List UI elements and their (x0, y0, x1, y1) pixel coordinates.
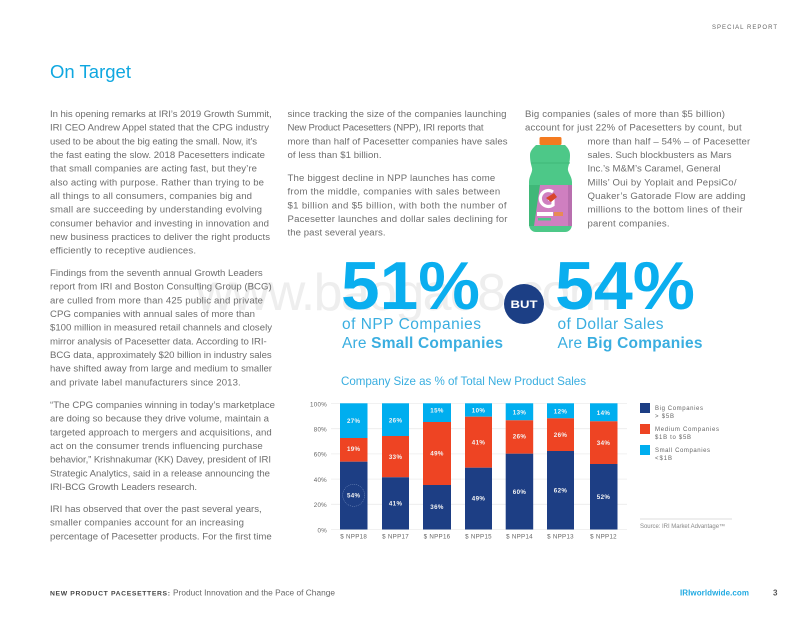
paragraph: biggest decline: $1 billion and $5 billion, with both the number of (288, 200, 507, 211)
text block: column 3: millions to the bottom lines of their (588, 205, 743, 216)
paragraph: growth leaders report: have shifted away from large and medium to smaller (50, 364, 273, 375)
text block: column 3: parent companies. (588, 218, 670, 229)
legend item: small companies (640, 445, 710, 462)
value labels: 26% (389, 417, 402, 424)
paragraph: growth leaders report: CPG companies with annual sales of more than (50, 309, 255, 320)
value labels: 26% (554, 432, 567, 439)
x axis labels: $ NPP17 (382, 534, 409, 540)
paragraph: growth leaders report: $100 million in measured retail channels and closely (50, 323, 272, 334)
paragraph: growth leaders report: mirror analysis of Pacesetter data. According to IRI- (50, 336, 267, 347)
paragraph: smaller companies (50, 504, 272, 542)
x axis labels (340, 534, 617, 540)
text block: column 3: Inc.’s M&M’s Caramel, General (588, 164, 720, 175)
paragraph: growth leaders report: and private label manufacturers since 2013. (50, 377, 241, 388)
value labels: 34% (597, 440, 610, 447)
value labels: 52% (597, 494, 610, 501)
badge: but: BUT (510, 299, 538, 311)
value labels: 49% (430, 451, 444, 458)
paragraph: growth leaders report: report from IRI and Boston Consulting Group (BCG) (50, 282, 272, 293)
x axis labels: $ NPP18 (340, 534, 367, 540)
y axis labels: 80% (314, 426, 327, 434)
paragraph: opening remarks: efficiently to receptive audiences. (50, 246, 196, 257)
value labels: 13% (513, 409, 526, 416)
legend item: medium companies: $1B to $5B (655, 435, 691, 441)
legend item: big companies: Big Companies (655, 406, 703, 412)
paragraph: opening remarks: used to be about the big eating the small. Now, it’s (50, 136, 257, 147)
footer: publication line (50, 588, 335, 598)
text block: column 3: account for just 22% of Pacesetters by count, but (525, 123, 742, 134)
paragraph: growth leaders report (50, 268, 273, 388)
legend item: big companies (640, 403, 703, 420)
value labels: 14% (597, 410, 610, 417)
callout: 54% of dollar sales: Are Big Companies (558, 335, 702, 352)
value labels (347, 407, 610, 511)
callout: 51% of NPP companies (341, 248, 503, 352)
paragraph: quote: targeted approach to mergers and acquisitions, and (50, 427, 272, 438)
value labels: 10% (472, 407, 485, 414)
text block: column 3: Quaker’s Gatorade Flow are adding (588, 191, 746, 202)
header: special report: SPECIAL REPORT (712, 25, 777, 31)
x axis labels: $ NPP12 (590, 534, 617, 540)
paragraph: opening remarks: that small companies are acting fast, but they’re (50, 164, 257, 175)
paragraph: smaller companies: smaller companies account for an increasing (50, 518, 244, 529)
value labels: 54% (347, 493, 361, 500)
legend item: small companies: <$1B (655, 456, 672, 462)
paragraph: quote: “The CPG companies winning in today’s marketplace (50, 400, 275, 411)
footer: page number: 3 (773, 588, 778, 598)
legend item: big companies: > $5B (655, 414, 674, 420)
paragraph: tracking size: New Product Pacesetters (NPP), IRI reports that (288, 123, 484, 134)
paragraph: biggest decline: The biggest decline in NPP launches has come (288, 173, 495, 184)
paragraph: growth leaders report: BCG data, approximately $20 billion in industry sales (50, 350, 272, 361)
value labels: 15% (430, 407, 444, 414)
bar: NPP18 (340, 403, 368, 530)
value labels: 33% (389, 454, 402, 461)
text block: column 2 (288, 109, 508, 239)
legend item: medium companies: Medium Companies (655, 427, 719, 433)
paragraph: quote: act on the consumer trends influencing purchase (50, 441, 263, 452)
legend item: medium companies (640, 424, 719, 441)
icon: gatorade bottle (529, 137, 572, 232)
value labels: 36% (430, 504, 444, 511)
y axis labels: 20% (314, 502, 327, 509)
paragraph: opening remarks: the fast eating the slow. 2018 Pacesetters indicate (50, 150, 265, 161)
text block: column 3: Big companies (sales of more than $5 billion) (525, 109, 725, 120)
paragraph: quote (50, 400, 275, 493)
callout: 51% of NPP companies: Are Small Companies (342, 335, 503, 352)
callout: 54% of dollar sales: of Dollar Sales (558, 316, 664, 333)
text block: column 3: sales. Such blockbusters as Mars (588, 150, 732, 161)
value labels: 60% (513, 489, 526, 496)
bar: NPP16 (423, 403, 451, 530)
paragraph: tracking size: more than half of Pacesetter companies have sales (288, 136, 508, 147)
paragraph: biggest decline: Pacesetter launches and dollar sales declining for (288, 214, 508, 225)
callout: 54% of dollar sales (555, 248, 702, 352)
text block: column 3: more than half – 54% – of Pacesetter (588, 136, 751, 147)
paragraph: tracking size: of less than $1 billion. (288, 150, 382, 161)
paragraph: tracking size: since tracking the size of the companies launching (288, 109, 506, 120)
y axis labels (310, 401, 327, 534)
bar: NPP12 (590, 403, 618, 530)
value labels: 26% (513, 433, 526, 440)
value labels: 12% (554, 408, 567, 415)
paragraph: quote: behavior,” Krishnakumar (KK) Davey, president of IRI (50, 455, 271, 466)
paragraph: opening remarks: new business practices to deliver the right products (50, 232, 270, 243)
text block: column 3: Mills’ Oui by Yoplait and PepsiCo/ (588, 177, 737, 188)
paragraph: quote: are doing so because they drive volume, maintain a (50, 414, 270, 425)
paragraph: opening remarks (50, 109, 272, 257)
paragraph: biggest decline: the past several years. (288, 228, 386, 239)
chart title: Company Size as % of Total New Product Sales (341, 375, 586, 388)
y axis labels: 40% (314, 477, 327, 484)
legend item: small companies: Small Companies (655, 448, 710, 454)
paragraph: tracking size (288, 109, 508, 161)
x axis labels: $ NPP13 (547, 534, 574, 540)
x axis labels: $ NPP15 (465, 534, 492, 540)
paragraph: biggest decline (288, 173, 508, 239)
paragraph: opening remarks: consumer behavior and investing in innovation and (50, 218, 269, 229)
paragraph: growth leaders report: Findings from the seventh annual Growth Leaders (50, 268, 263, 279)
value labels: 62% (554, 487, 567, 494)
value labels: 41% (389, 501, 402, 508)
legend (640, 403, 719, 462)
paragraph: smaller companies: IRI has observed that over the past several years, (50, 504, 262, 515)
paragraph: opening remarks: also acting with purpose. Rather than trying to be (50, 177, 264, 188)
badge: but (504, 284, 544, 324)
source note: Source: IRI Market Advantage™ (640, 523, 725, 530)
y axis labels: 60% (314, 452, 327, 459)
callout: 51% of NPP companies: 51% (341, 248, 480, 324)
text: www.baogao8.com (195, 264, 612, 322)
footer: publication line: NEW PRODUCT PACESETTERS: (50, 590, 170, 598)
callout: 51% of NPP companies: of NPP Companies (342, 316, 481, 333)
bar: NPP14 (506, 403, 533, 530)
y axis labels: 0% (317, 527, 327, 534)
value labels: 19% (347, 446, 361, 453)
value labels: 41% (472, 440, 485, 447)
bar: NPP17 (382, 403, 409, 530)
text block: column 1 (50, 109, 275, 542)
footer: publication line: Product Innovation and the Pace of Change (173, 588, 335, 598)
paragraph: opening remarks: In his opening remarks at IRI’s 2019 Growth Summit, (50, 109, 272, 120)
text block: column 3 (525, 109, 751, 229)
value labels: 49% (472, 496, 485, 503)
paragraph: quote: IRI-BCG Growth Leaders research. (50, 482, 197, 493)
x axis labels: $ NPP14 (506, 534, 533, 540)
paragraph: quote: Strategic Analytics, said in a release announcing the (50, 468, 270, 479)
paragraph: biggest decline: from the middle, companies with sales between (288, 187, 500, 198)
y axis labels: 100% (310, 401, 327, 408)
title: On Target (50, 61, 131, 82)
bar: NPP13 (547, 403, 574, 530)
x axis labels: $ NPP16 (424, 534, 451, 540)
paragraph: growth leaders report: are culled from more than 425 public and private (50, 295, 263, 306)
highlight: dashed circle on 54% (343, 484, 365, 506)
bar: NPP15 (465, 403, 492, 530)
paragraph: opening remarks: IRI CEO Andrew Appel stated that the CPG industry (50, 123, 269, 134)
paragraph: opening remarks: all things to all consumers, companies big and (50, 191, 252, 202)
callout: 54% of dollar sales: 54% (555, 248, 695, 324)
paragraph: smaller companies: percentage of Pacesetter products. For the first time (50, 531, 272, 542)
footer: website: IRIworldwide.com (680, 588, 749, 598)
value labels: 27% (347, 418, 361, 425)
paragraph: opening remarks: small are succeeding by understanding evolving (50, 205, 262, 216)
stacked bar chart (310, 401, 627, 540)
